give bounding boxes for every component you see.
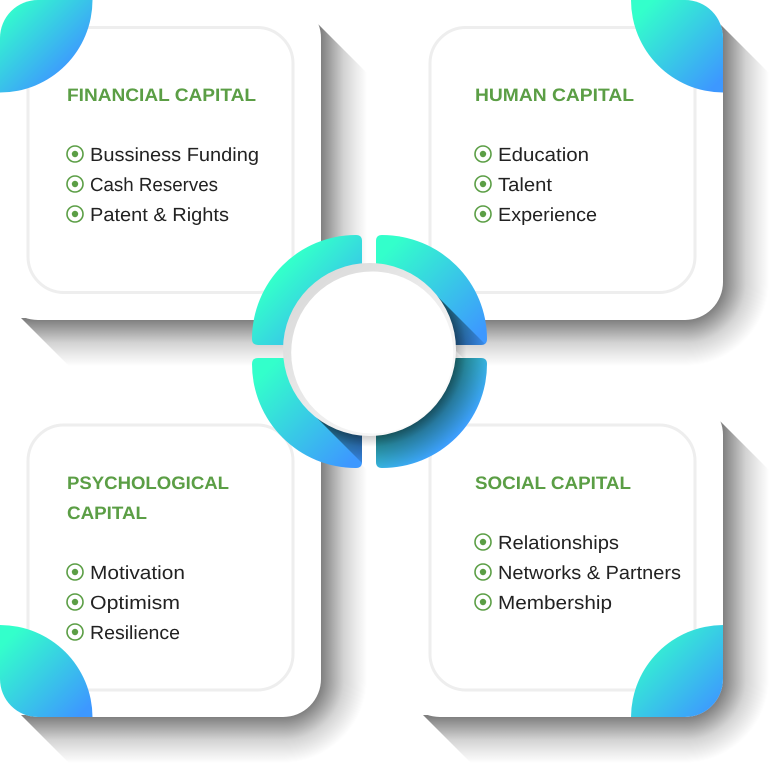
list: financial items: Cash Reserves xyxy=(90,175,218,196)
list: human items: Education xyxy=(498,145,589,166)
list: psychological items: Optimism xyxy=(90,593,180,614)
segment: top-left xyxy=(252,235,362,345)
list: financial items: Patent & Rights xyxy=(90,205,229,226)
heading: social capital: SOCIAL CAPITAL xyxy=(475,473,631,493)
centre circle contact shadow xyxy=(309,289,530,510)
heading: human capital: HUMAN CAPITAL xyxy=(475,85,634,105)
list: social items: Relationships xyxy=(498,533,619,554)
panel: psychological capital xyxy=(0,397,321,717)
list: human items: Experience xyxy=(498,205,597,226)
list: financial items xyxy=(67,145,259,226)
icon: bottom-right leaf xyxy=(631,625,723,717)
list: social items: Networks & Partners xyxy=(498,563,681,584)
centre circle long shadow on segments xyxy=(317,296,487,468)
list: psychological items: Resilience xyxy=(90,623,180,644)
panel: financial capital xyxy=(0,0,321,320)
heading: psychological capital: CAPITAL xyxy=(67,503,147,523)
panel: social capital xyxy=(402,397,723,717)
icon: top-left leaf xyxy=(0,0,92,92)
segment: top-right xyxy=(376,235,487,345)
central ring diagram xyxy=(252,235,487,468)
list: social items xyxy=(475,533,681,614)
list: social items: Membership xyxy=(498,593,612,614)
list: financial items: Bussiness Funding xyxy=(90,145,259,166)
heading: psychological capital xyxy=(67,473,229,523)
segment: bottom-left xyxy=(252,358,362,468)
list: human items xyxy=(475,145,597,226)
list: psychological items xyxy=(67,563,185,644)
panel: human capital xyxy=(402,0,723,320)
centre circle xyxy=(283,263,456,436)
icon: top-right leaf xyxy=(631,0,723,92)
icon: bottom-left leaf xyxy=(0,625,92,717)
segment: bottom-right xyxy=(376,358,487,468)
heading: psychological capital: PSYCHOLOGICAL xyxy=(67,473,229,493)
list: psychological items: Motivation xyxy=(90,563,185,584)
heading: financial capital: FINANCIAL CAPITAL xyxy=(67,85,256,105)
list: human items: Talent xyxy=(498,175,553,196)
